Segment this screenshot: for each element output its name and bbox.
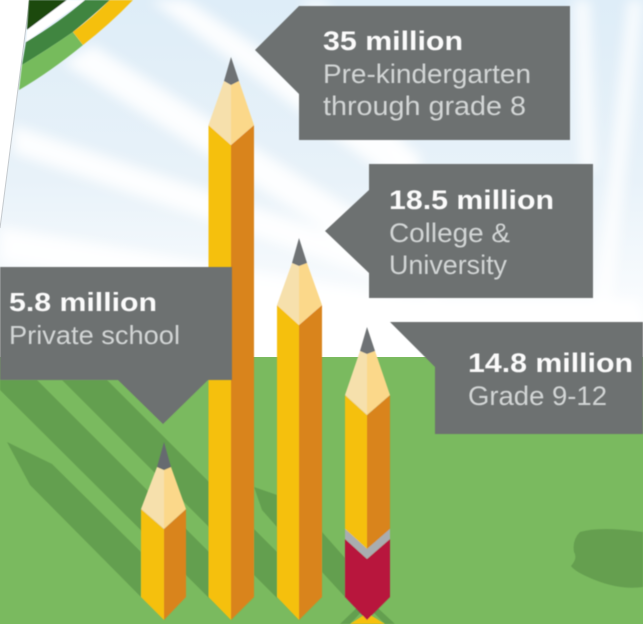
callout: 5.8 million: 5.8 million bbox=[9, 287, 157, 317]
callout: 14.8 million bbox=[390, 322, 643, 434]
callout: 5.8 million: Private school bbox=[9, 320, 180, 350]
callout: 35 million: Pre-kindergarten bbox=[323, 59, 531, 89]
callout: 35 million bbox=[255, 6, 570, 140]
callout: 18.5 million bbox=[325, 164, 593, 298]
callout: 18.5 million: 18.5 million bbox=[389, 185, 554, 215]
pencil: college and university bbox=[277, 238, 322, 620]
callout: 35 million: through grade 8 bbox=[323, 91, 526, 121]
pencil: pre-kindergarten through grade 8 bbox=[208, 57, 254, 620]
ground shadow blob bbox=[571, 529, 643, 588]
pencil shadows bbox=[0, 380, 395, 624]
callout: 18.5 million: University bbox=[389, 250, 507, 280]
callout: 18.5 million: College & bbox=[389, 218, 510, 248]
white page edge bbox=[0, 0, 30, 228]
callout: 35 million: 35 million bbox=[323, 26, 463, 56]
callout: 14.8 million: 14.8 million bbox=[468, 348, 633, 378]
grass ground bbox=[0, 357, 643, 624]
callout: 5.8 million bbox=[0, 267, 232, 424]
pencil: grade 9-12 bbox=[345, 327, 390, 624]
callout: 14.8 million: Grade 9-12 bbox=[468, 381, 607, 411]
pencil: private school bbox=[141, 442, 186, 620]
sky background bbox=[0, 0, 643, 358]
ribbon arc corner bbox=[19, 0, 133, 90]
